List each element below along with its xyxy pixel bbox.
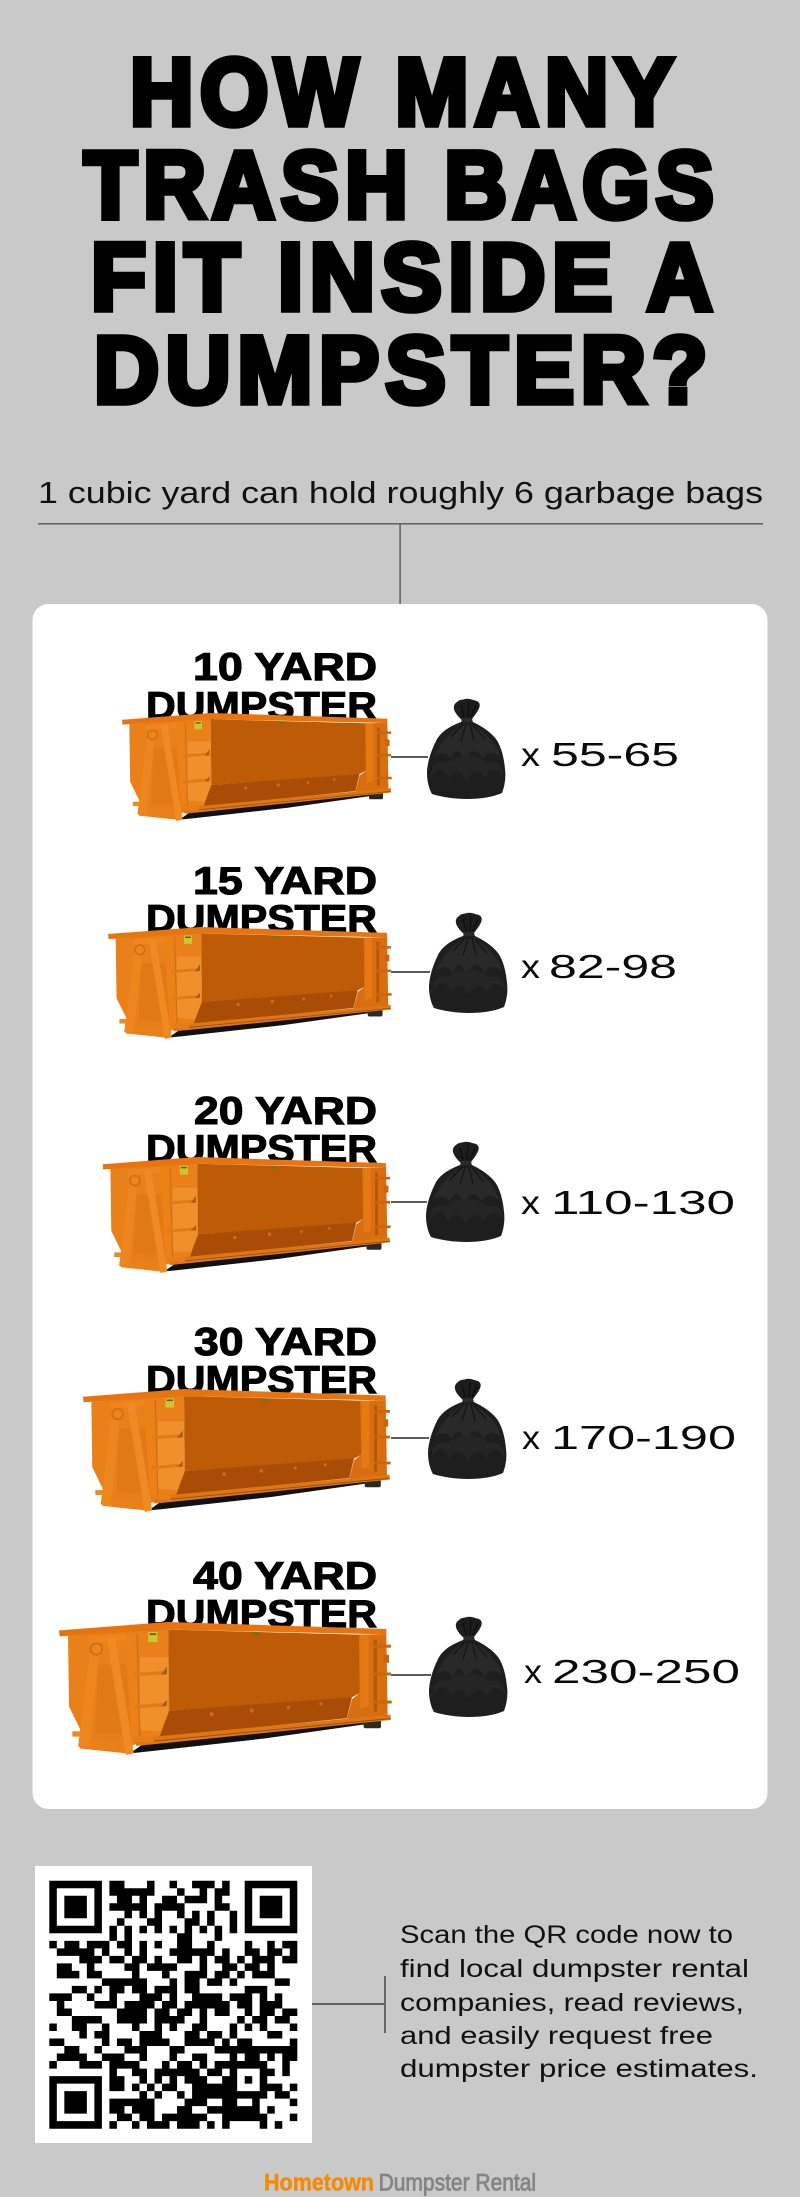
count: 170-190 bags — [522, 1420, 736, 1457]
connector line — [391, 1437, 429, 1439]
count: 230-250 bags: x — [524, 1654, 542, 1691]
icon: trash bag — [429, 913, 507, 1013]
icon: trash bag — [428, 1379, 506, 1479]
scan call to action text: dumpster price estimates. — [400, 2055, 758, 2083]
count: 230-250 bags: 230-250 — [552, 1654, 740, 1691]
scan call to action text: and easily request free — [400, 2022, 713, 2050]
count: 110-130 bags: x — [521, 1185, 540, 1222]
icon: trash bag — [429, 1617, 507, 1717]
heading: 15 yard dumpster: DUMPSTER — [146, 898, 377, 941]
row: 15 yard dumpster — [108, 860, 677, 1039]
count: 82-98 bags — [521, 949, 677, 986]
dumpster image: 30 yard — [83, 1389, 391, 1512]
heading: 10 yard dumpster: 10 YARD — [193, 646, 377, 689]
scan call to action text: Scan the QR code now to — [400, 1921, 733, 1949]
row: 10 yard dumpster — [122, 646, 679, 821]
count: 55-65 bags — [521, 737, 679, 774]
count: 230-250 bags — [524, 1654, 740, 1691]
scan call to action text: find local dumpster rental — [400, 1955, 749, 1983]
title: DUMPSTER? — [94, 318, 714, 424]
heading: 15 yard dumpster: 15 YARD — [193, 860, 377, 903]
subtitle connector lines — [38, 523, 763, 604]
dumpster image: 20 yard — [103, 1157, 391, 1273]
icon: trash bag — [426, 1142, 504, 1242]
count: 82-98 bags: 82-98 — [549, 949, 677, 986]
scan call to action text — [400, 1921, 758, 2083]
heading: 40 yard dumpster: 40 YARD — [193, 1555, 377, 1598]
count: 170-190 bags: 170-190 — [551, 1420, 736, 1457]
icon: trash bag — [427, 699, 505, 799]
count: 110-130 bags: 110-130 — [551, 1185, 735, 1222]
count: 110-130 bags — [521, 1185, 735, 1222]
subtitle: 1 cubic yard can hold roughly 6 garbage bags — [38, 475, 763, 510]
title: FIT INSIDE A — [91, 224, 719, 330]
heading: 15 yard dumpster — [146, 860, 377, 941]
heading: 30 yard dumpster — [146, 1321, 377, 1402]
title: HOW MANY — [130, 40, 680, 146]
heading: 10 yard dumpster: DUMPSTER — [146, 685, 377, 728]
heading: 20 yard dumpster: 20 YARD — [194, 1090, 377, 1133]
heading: 30 yard dumpster: DUMPSTER — [146, 1359, 377, 1402]
heading: 30 yard dumpster: 30 YARD — [194, 1321, 377, 1364]
title: TRASH BAGS — [84, 132, 720, 238]
count: 170-190 bags: x — [522, 1420, 540, 1457]
heading: 10 yard dumpster — [146, 646, 377, 728]
connector line — [391, 1674, 431, 1676]
dumpster image: 15 yard — [108, 927, 392, 1039]
dumpster image: 40 yard — [59, 1622, 392, 1755]
QR connector bracket — [312, 1976, 386, 2033]
count: 55-65 bags: 55-65 — [551, 737, 679, 774]
count: 82-98 bags: x — [521, 949, 540, 986]
row: 30 yard dumpster — [83, 1321, 736, 1512]
QR code — [35, 1866, 312, 2143]
row: 20 yard dumpster — [103, 1090, 735, 1273]
logo: Hometown Dumpster Rental: Dumpster Rental — [379, 2170, 536, 2197]
connector line — [391, 756, 428, 758]
dumpster image: 10 yard — [122, 713, 392, 821]
scan call to action text: companies, read reviews, — [400, 1989, 744, 2017]
heading: 20 yard dumpster — [146, 1090, 377, 1171]
connector line — [391, 1201, 427, 1203]
panel: dumpster sizes — [32, 604, 768, 1809]
heading: 20 yard dumpster: DUMPSTER — [146, 1128, 377, 1171]
count: 55-65 bags: x — [521, 737, 540, 774]
heading: 40 yard dumpster — [146, 1555, 377, 1636]
logo: Hometown Dumpster Rental — [264, 2170, 536, 2197]
title — [84, 40, 720, 424]
row: 40 yard dumpster — [59, 1555, 740, 1755]
logo: Hometown Dumpster Rental: Hometown — [264, 2170, 374, 2197]
connector line — [391, 971, 430, 973]
heading: 40 yard dumpster: DUMPSTER — [146, 1593, 377, 1636]
